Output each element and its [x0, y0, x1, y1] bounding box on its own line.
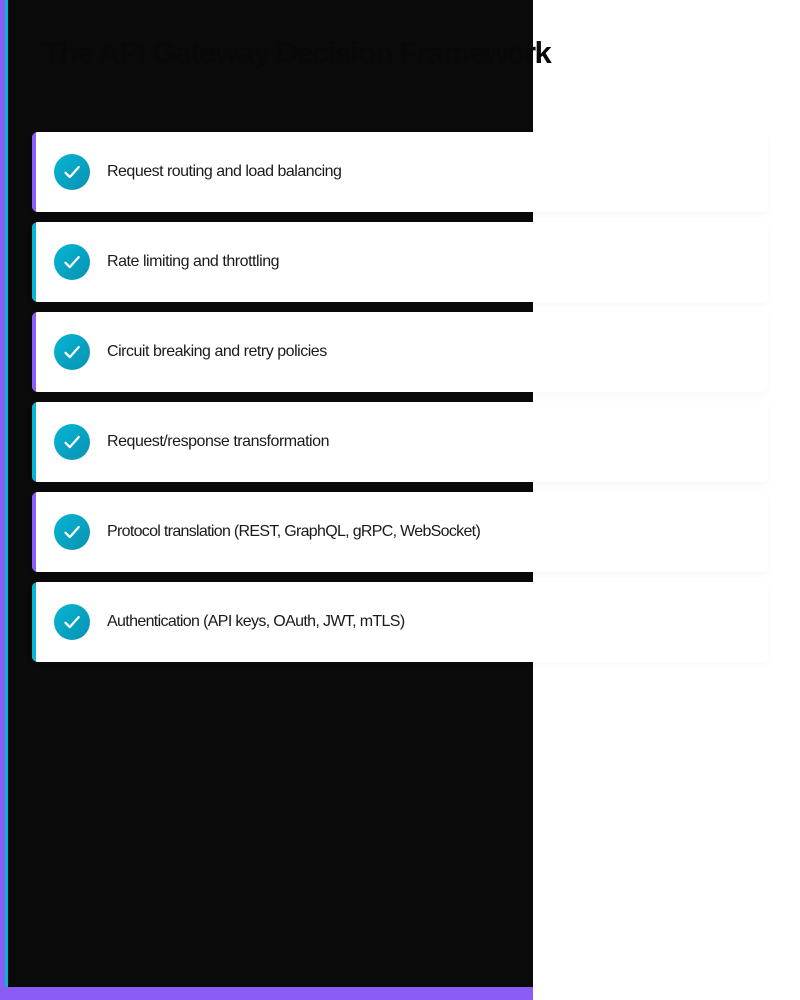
- card: circuit breaking: Circuit breaking and retry policies: [107, 343, 327, 360]
- card: rate limiting: [32, 222, 768, 302]
- title: The API Gateway Decision Framework: [42, 35, 550, 70]
- card: circuit breaking: [32, 312, 768, 392]
- card: protocol translation: Protocol translation (REST, GraphQL, gRPC, WebSocket): [107, 523, 480, 540]
- card: rate limiting: Rate limiting and throttling: [107, 253, 279, 270]
- left accent bar cyan: [5, 0, 8, 987]
- card: authentication: Authentication (API keys, OAuth, JWT, mTLS): [107, 613, 404, 630]
- card: transformation: Request/response transformation: [107, 433, 329, 450]
- bottom accent bar: [0, 987, 533, 1000]
- card: transformation: [32, 402, 768, 482]
- left accent bar purple: [0, 0, 5, 1000]
- dark background panel: [8, 0, 533, 987]
- card: authentication: [32, 582, 768, 662]
- card: protocol translation: [32, 492, 768, 572]
- card: request routing: [32, 132, 768, 212]
- card: request routing: Request routing and load balancing: [107, 163, 341, 180]
